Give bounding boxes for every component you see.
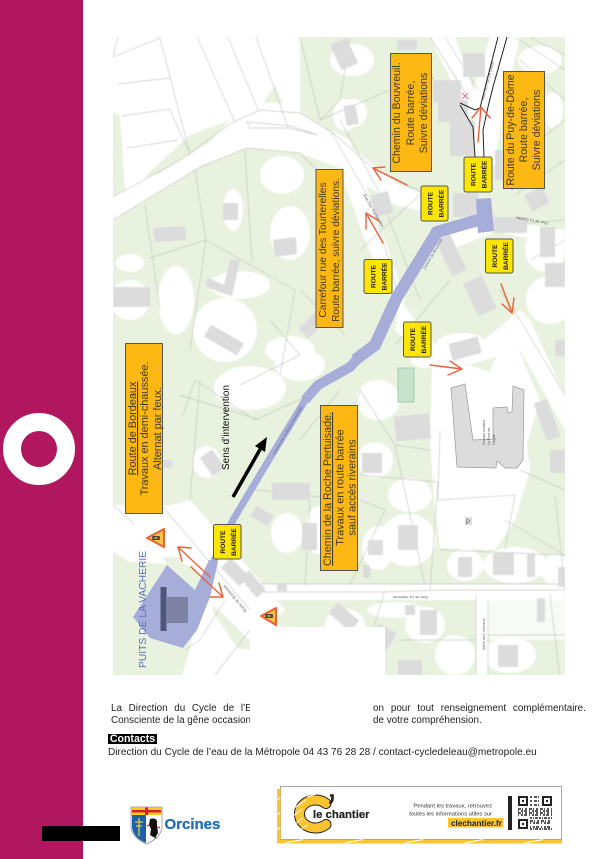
callout: Chemin de la Roche Pertuisade: [320, 406, 358, 570]
sign: route barrée 1: ROUTE: [220, 530, 227, 554]
text block: information right fragment: [373, 703, 586, 726]
sign: route barrée 5: ROUTE: [492, 244, 499, 268]
callout: Chemin du Bouvreuil: Suivre déviations: [418, 73, 430, 153]
icon: traffic light triangle 1: [147, 529, 164, 547]
text: banner message: [409, 804, 492, 818]
label: sens d'intervention: Sens d’intervention: [221, 385, 232, 470]
sign: route barrée 5: [486, 239, 513, 273]
sign: route barrée 3: BARRÉE: [436, 189, 446, 217]
callout: Route de Bordeaux: [126, 344, 164, 514]
callout: Chemin de la Roche Pertuisade: Travaux en route barrée: [334, 429, 346, 546]
road labels: Rue Du Puy De Dôme: [480, 60, 495, 100]
sign: route barrée 1: [214, 524, 241, 559]
sign: route barrée 2: ROUTE: [370, 264, 378, 288]
sign: route barrée 6: [404, 322, 431, 357]
orange arrows: [178, 107, 514, 597]
work route: Chemin De La Roche Pertuisade: [272, 405, 304, 456]
icon: C logo: [293, 794, 332, 830]
sign: route barrée 6: BARRÉE: [419, 325, 428, 353]
callout: Route du Puy-de-Dôme: Suivre déviations: [531, 90, 543, 170]
callout: Route de Bordeaux: Route de Bordeaux: [127, 381, 139, 475]
callout: Route du Puy-de-Dôme: [504, 72, 544, 188]
road labels: [222, 58, 548, 650]
callout: Carrefour rue des Tourterelles: [316, 170, 343, 328]
work route: Chemin du Bouvreuil: [422, 238, 444, 270]
text: banner message: Pendant les travaux, retrouvez: [413, 804, 492, 810]
text: banner message: toutes les informations utiles sur: [409, 812, 492, 818]
callout: Route de Bordeaux: Alternat par feux.: [152, 387, 164, 470]
parking marker: [465, 517, 472, 525]
road labels: Rue de La Combe: [515, 215, 548, 226]
parcel lines: [113, 37, 565, 680]
logo text: Orcines: Orcines: [164, 816, 220, 833]
groupe scolaire building: [451, 384, 524, 468]
green patches over white: [113, 85, 283, 650]
road labels: Rue de La Vacherie: [392, 595, 428, 600]
sign: route barrée 6: ROUTE: [410, 327, 417, 351]
icon: white ring: [3, 413, 75, 485]
callout: Chemin du Bouvreuil: Route barrée,: [405, 81, 417, 145]
callout: Chemin de la Roche Pertuisade: sauf accès riverains: [346, 439, 358, 536]
text: le chantier: le chantier: [313, 809, 370, 821]
black direction arrow: [233, 437, 267, 497]
sports field: [398, 368, 414, 402]
callout: Route de Bordeaux: Travaux en demi-chaussée.: [139, 362, 151, 495]
groupe scolaire building: Groupe scolaire: [482, 420, 486, 445]
road labels: Rue Des Tourterelles: [362, 193, 385, 228]
road labels: Rue De Saut: [419, 58, 435, 81]
black redaction bar: [42, 826, 120, 841]
sign: route barrée 2: [364, 260, 392, 294]
sign: route barrée 3: ROUTE: [428, 191, 434, 215]
groupe scolaire building: l'Aiguë: [492, 434, 496, 445]
work route: [133, 198, 494, 648]
road labels: Rue Du Puy: [509, 168, 520, 190]
deviation road black lines: [460, 37, 507, 157]
label: puits de la vacherie: PUITS DE LA VACHERIE: [138, 551, 149, 668]
sign: route barrée 4: ROUTE: [470, 162, 478, 186]
callout: Chemin du Bouvreuil: [390, 54, 432, 172]
road labels: Route de Bordeaux: [222, 584, 248, 614]
sidebar with ring: [0, 0, 83, 859]
callout: Chemin du Bouvreuil: Chemin du Bouvreuil.: [391, 62, 403, 164]
map panel: [113, 37, 565, 675]
sign: route barrée 1: BARRÉE: [229, 527, 238, 556]
road labels: Allée des Volcans: [481, 618, 486, 650]
text block: information right fragment: on pour tout renseignement complémentaire.: [373, 703, 586, 714]
groupe scolaire building: Le Pont de: [487, 428, 491, 445]
sign: route barrée 4: [464, 157, 492, 192]
sign: route barrée 3: [421, 186, 448, 221]
icon: traffic light triangle 2: [261, 608, 276, 625]
callout: Route du Puy-de-Dôme: Route barrée,: [518, 98, 530, 162]
text: contact details: Direction du Cycle de l’eau de la Métropole 04 43 76 28 28 / contact-cycledeleau@metropole.eu: [108, 747, 537, 758]
text block: information left fragment: [111, 703, 250, 726]
text block: information right fragment: de votre compréhension.: [373, 715, 482, 726]
callout: Chemin de la Roche Pertuisade: Chemin de la Roche Pertuisade.: [322, 412, 334, 566]
sign: route barrée 4: BARRÉE: [480, 160, 488, 188]
icon: QR code: [518, 796, 552, 829]
sign: route barrée 2: BARRÉE: [380, 262, 388, 290]
heading: contacts: Contacts: [110, 733, 155, 745]
buildings: [113, 38, 565, 675]
callout: Carrefour rue des Tourterelles: Route barrée, suivre déviations.: [331, 178, 342, 322]
parking marker: P: [466, 520, 470, 526]
text: clechantier.fr: clechantier.fr: [451, 819, 503, 828]
sign: route barrée 5: BARRÉE: [501, 241, 510, 270]
callout: Route du Puy-de-Dôme: Route du Puy-de-Dôme: [505, 74, 517, 186]
callout: Carrefour rue des Tourterelles: Carrefour rue des Tourterelles: [318, 182, 329, 318]
